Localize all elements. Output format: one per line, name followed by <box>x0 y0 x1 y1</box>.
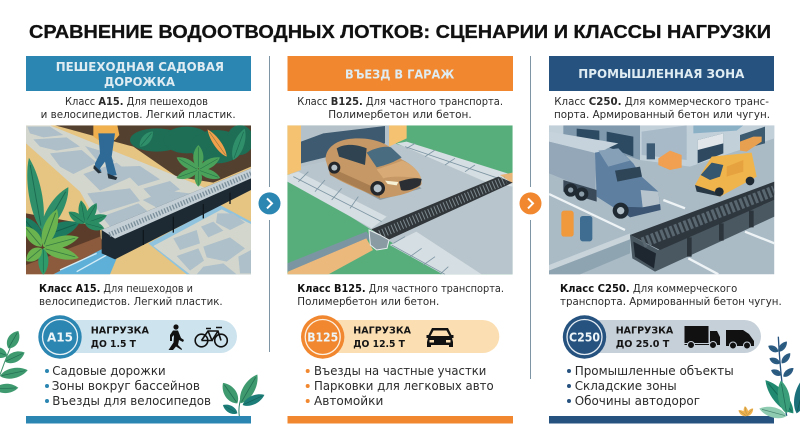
bollards <box>561 211 592 241</box>
class circle A15 <box>38 315 82 359</box>
bullet list: garden path: Садовые дорожки <box>52 363 166 378</box>
van <box>695 153 757 197</box>
header: garden path: ДОРОЖКА <box>104 74 175 89</box>
icon: small truck <box>726 330 754 349</box>
intro text: class A15 <box>41 97 236 121</box>
arrow: blue <box>258 192 280 214</box>
intro text: class A15: Класс A15. Для пешеходов <box>65 97 208 108</box>
class circle B125: B125 <box>307 330 338 344</box>
footer bar blue <box>26 416 251 424</box>
class circle A15: A15 <box>47 330 73 344</box>
icon: pedestrian <box>168 324 184 350</box>
header: industrial <box>549 56 774 91</box>
footer bar navy <box>549 416 774 424</box>
body text: class A15 <box>39 284 223 308</box>
load badge A15 <box>38 315 237 359</box>
plant: first panel corner <box>218 372 266 416</box>
load label C250: ДО 25.0 Т <box>616 339 669 350</box>
body text: class C250 <box>560 284 782 308</box>
illustration: garden path with plastic channel <box>17 125 253 275</box>
bullet list: industrial: Промышленные объекты <box>575 363 734 378</box>
divider right <box>530 56 532 379</box>
header: industrial: ПРОМЫШЛЕННАЯ ЗОНА <box>578 66 745 81</box>
intro text: class B125 <box>297 97 503 121</box>
intro text: class A15: и велосипедистов. Легкий пластик. <box>41 110 236 121</box>
header: garden path <box>26 56 251 91</box>
class circle B125 <box>301 315 344 359</box>
load label C250: НАГРУЗКА <box>616 326 674 336</box>
panel: garden path <box>17 56 253 424</box>
header: driveway <box>288 56 513 91</box>
body text: class B125 <box>297 284 504 308</box>
truck <box>549 132 661 219</box>
illustration: driveway with car and channel <box>287 125 513 274</box>
bullet list: driveway: Парковки для легковых авто <box>314 378 494 393</box>
icon: car <box>426 328 454 347</box>
bullet list: garden path: Зоны вокруг бассейнов <box>52 378 200 393</box>
body text: class A15: Класс A15. Для пешеходов и <box>39 284 193 295</box>
load label A15: НАГРУЗКА <box>91 326 149 336</box>
bullet list: industrial: Складские зоны <box>575 378 677 393</box>
panel: garage driveway <box>287 56 513 424</box>
panel: industrial zone <box>549 56 782 424</box>
load label B125: ДО 12.5 Т <box>353 339 405 350</box>
body text: class C250: Класс C250. Для коммерческого <box>560 284 737 295</box>
arrow: orange <box>520 192 542 214</box>
plant: right corner <box>737 337 800 421</box>
class circle C250 <box>563 315 606 359</box>
bullet list: driveway: Автомойки <box>314 393 383 408</box>
intro text: class C250: порта. Армированный бетон или чугун. <box>554 110 770 121</box>
body text: class A15: велосипедистов. Легкий пластик. <box>39 297 223 308</box>
load label C250 <box>616 326 674 350</box>
bullet list: industrial <box>567 363 734 408</box>
intro text: class C250 <box>554 97 770 121</box>
bullet list: garden path: Въезды для велосипедов <box>52 393 211 408</box>
icon: large truck <box>684 326 720 348</box>
car <box>326 138 422 200</box>
load label A15 <box>91 326 149 350</box>
intro text: class B125: Полимербетон или бетон. <box>328 110 472 121</box>
load label B125: НАГРУЗКА <box>353 326 411 336</box>
walking person legs <box>93 125 119 180</box>
body text: class B125: Класс B125. Для частного транспорта. <box>297 284 504 295</box>
bullet list: driveway: Въезды на частные участки <box>314 363 486 378</box>
icon: bicycle <box>195 328 227 347</box>
body text: class C250: транспорта. Армированный бетон чугун. <box>560 297 782 308</box>
class circle C250: C250 <box>569 330 600 344</box>
divider left <box>268 56 270 352</box>
intro text: class C250: Класс C250. Для коммерческого транс- <box>554 97 769 108</box>
bullet list: driveway <box>306 363 494 408</box>
body text: class B125: Полимербетон или бетон. <box>297 297 439 308</box>
load badge B125 <box>301 315 499 359</box>
illustration: industrial road with truck, van, channel <box>549 125 774 274</box>
bullet list: industrial: Обочины автодорог <box>575 393 700 408</box>
bullet list: garden path <box>45 363 211 408</box>
intro text: class B125: Класс B125. Для частного транспорта. <box>297 97 503 108</box>
plant: left edge <box>0 328 29 394</box>
header: driveway: ВЪЕЗД В ГАРАЖ <box>345 66 454 81</box>
header: garden path: ПЕШЕХОДНАЯ САДОВАЯ <box>56 59 224 74</box>
load badge C250 <box>563 315 761 359</box>
load label A15: ДО 1.5 Т <box>91 339 136 350</box>
title: СРАВНЕНИЕ ВОДООТВОДНЫХ ЛОТКОВ: СЦЕНАРИИ И КЛАССЫ НАГРУЗКИ <box>29 21 771 42</box>
load label B125 <box>353 326 411 350</box>
footer bar orange <box>288 416 513 424</box>
